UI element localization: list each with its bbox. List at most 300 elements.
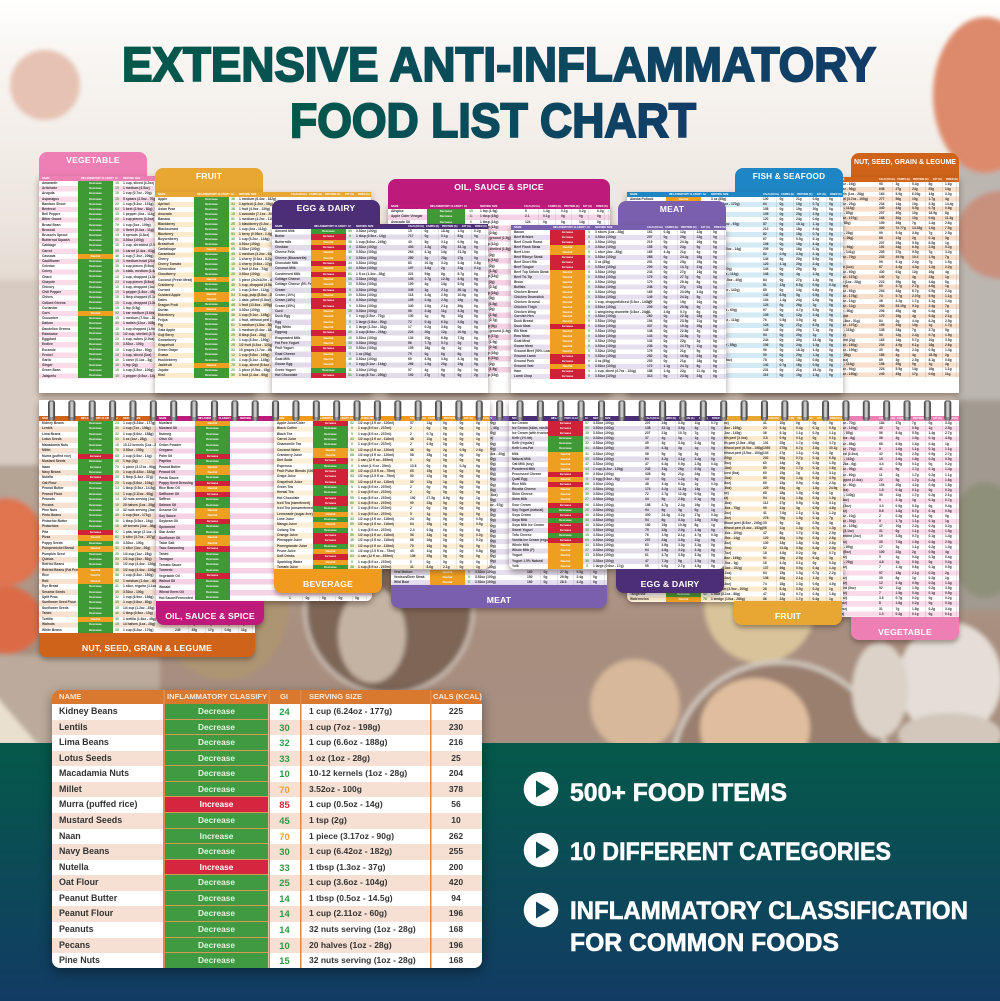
table: egg and dairy rows: Neutral: [561, 492, 570, 496]
table rows: 33: [279, 862, 290, 873]
table: vegetable rows: Decrease: [89, 202, 102, 206]
table: fruit rows: Decrease: [205, 342, 218, 346]
table: beverage rows: Increase: [325, 480, 336, 484]
table: nut rows: CALS (KCAL): [879, 178, 895, 181]
table: vegetable rows: Decrease: [89, 269, 102, 273]
table rows: 45: [279, 815, 290, 826]
table: nut rows: Decrease: [89, 513, 102, 517]
table: egg and dairy rows: NAME: [275, 225, 282, 228]
table: nut rows: Decrease: [89, 426, 102, 430]
table: vegetable rows: Decrease: [89, 337, 102, 341]
table rows: Decrease: [198, 924, 235, 934]
table: vegetable rows: FAT (G): [933, 417, 942, 420]
table: fruit rows: [627, 400, 843, 601]
table: meat rows: 160 0g 27.5g 5.5g 0g 150 0g 29.9g 2.4g 0g 160 0g 28.3 4.2g 0g: [527, 570, 597, 584]
table rows: Decrease: [198, 908, 235, 918]
table: fish rows: GI: [703, 193, 706, 196]
table rows: 1 tsp (2g): [309, 815, 347, 825]
table: vegetable rows: Decrease: [89, 326, 102, 330]
table rows: 85: [279, 799, 290, 810]
tab: vegetable: [851, 617, 959, 640]
table: fruit rows: PROTEIN (G): [325, 193, 340, 196]
table: fruit rows: Decrease: [205, 237, 218, 241]
table: nut rows: Decrease: [89, 622, 102, 626]
table: nut rows: Decrease: [89, 611, 102, 615]
table: beverage rows: Decrease: [324, 432, 337, 436]
table: nut rows: [39, 400, 255, 633]
table: oil rows: INFLAMMATORY CLASSIFY: [198, 417, 231, 420]
table: beverage rows: Decrease: [324, 464, 337, 468]
table rows: 94: [451, 893, 461, 903]
table: beverage rows: Neutral: [326, 549, 335, 553]
table: vegetable rows: 15 15 10 15 20 64 15 20 79 15 15 51 10 39 46 15 35 15 15 23 10 15 10 15 10 52 15 30 15 18 20 15 15 15 30 15 15 15: [115, 181, 119, 378]
table: fruit rows: Decrease: [205, 262, 218, 266]
table: fruit rows: FIBER (G): [830, 417, 842, 420]
table rows: [52, 704, 482, 968]
tab: fruit: [734, 601, 842, 625]
table: nut rows: NAME: [746, 178, 753, 181]
table: vegetable rows: Neutral: [91, 254, 100, 258]
table: fruit rows: CALS (KCAL): [763, 417, 779, 420]
sheet: nut, seed, grain and legume (top row): [740, 153, 962, 400]
table: nut rows: 185 4g 8g 18g 2g 249 45g 17g 0.6g 11g: [175, 622, 246, 632]
table: vegetable rows: Decrease: [89, 243, 102, 247]
table: nut rows: GI: [819, 178, 822, 181]
table rows: 32 nuts serving (1oz - 28g): [309, 955, 416, 965]
table rows: Kidney Beans: [59, 706, 118, 716]
tab: vegetable: [39, 152, 147, 177]
table: meat rows: Increase: [562, 374, 573, 378]
table rows: 1 piece (3.17oz - 90g): [309, 831, 394, 841]
table rows: Decrease: [198, 893, 235, 903]
table: nut rows: Decrease: [89, 497, 102, 501]
table: beverage rows: Neutral: [326, 522, 335, 526]
table: fruit rows: GI: [231, 193, 234, 196]
table: oil rows: INFLAMMATORY CLASSIFY: [430, 205, 463, 208]
table: nut rows: PROTEIN (G): [913, 178, 928, 181]
table: egg and dairy rows: Neutral: [324, 341, 333, 345]
table: meat rows: Neutral: [563, 349, 572, 353]
table: vegetable rows: Decrease: [89, 238, 102, 242]
table: vegetable rows: Decrease: [89, 259, 102, 263]
table: beverage rows: Neutral: [326, 453, 335, 457]
table rows: 25: [279, 877, 290, 888]
table: meat rows: Neutral: [443, 575, 452, 579]
table: egg and dairy rows: Neutral: [561, 467, 570, 471]
table rows: Decrease: [198, 722, 235, 732]
table rows: 216: [449, 737, 463, 747]
table: meat rows: 3 slices (1oz - 28g) 3.52oz (100g) 3.52oz (100g) 3.52oz (100g) 1 slice (3oz - 85g) 3.52oz (100g) 3 oz (85g) 3.52oz (100g) 3.52oz (100g) 3.52oz (100g) 3.52oz (100g) 3.52oz (100g) 3.52oz (100g) 3.52oz (100g) 1 cup, chopped/diced (5.3oz - 140 g) 3.52oz (100g) 1 wing/wing drumette (0.8oz - 24g) 3.52oz (100g) 3.52oz (100g) 3.52oz (100g) 3.52oz (100g) 3.52oz (100g) 3.52oz (100g) 3.52oz (100g) 3.52oz (100g) 3.52oz (100g) 3 oz (85g) 3.52oz (100g) 1 cup, diced (4.7oz - 134g) 3.52oz (100g): [595, 230, 651, 378]
table: egg and dairy rows: Neutral: [561, 543, 570, 547]
table rows: Oat Flour: [59, 877, 98, 887]
table: vegetable rows: Decrease: [89, 290, 102, 294]
table: oil rows: Neutral: [208, 513, 217, 517]
table: beverage rows: Decrease: [324, 426, 337, 430]
table: nut rows: Decrease: [89, 459, 102, 463]
tab: meat: [618, 201, 726, 226]
table rows: 70: [279, 831, 290, 842]
table: egg and dairy rows: Decrease: [559, 446, 572, 450]
table: nut rows: Decrease: [89, 492, 102, 496]
table header: GI: [280, 692, 288, 701]
spiral binding rings: [48, 400, 952, 421]
table: oil rows: 1 tsp (1.9g) 1 tbsp (15g) 1 tbsp (14g) 1 tbsp (13g) 1 tsp (2.6g) 1 tsp, ground (1.9g) 1 tbsp (12g) 1 tsp, shelled (1.8g) 1 tsp (2g) 1 tbsp (14g) 1 tsp (2g) 1 tsp (1.3g) 1 tbsp (14g) 1 tsp (2g) 1 tsp (2.1g) 1 tbsp (16g) 1 tsp (3g) 1 tsp (1.8g) 1 tsp (2g) 1 tsp (1.9g) 1 tsp (2.7g) 1 tbsp (5g) 1 tsp, ground (1.9g) 1 tbsp (17g) 1 tsp (1.9g) 1 tsp (2.1g) 1 tbsp (16g) 1 tbsp (15g) 1 tsp (2g) 1 tsp (1.8g) 1 tbsp (15g): [480, 209, 511, 377]
table: fruit rows: Neutral: [207, 363, 216, 367]
table: oil rows: NAME: [159, 417, 166, 420]
table: vegetable rows: Decrease: [89, 363, 102, 367]
table: fruit rows: Decrease: [205, 217, 218, 221]
tab: beverage: [274, 569, 382, 593]
table: nut rows: Increase: [90, 530, 101, 534]
table rows: Macadamia Nuts: [59, 768, 129, 778]
table: nut rows: Decrease: [89, 606, 102, 610]
table: fruit rows: SERVING SIZE: [239, 193, 256, 196]
table: fish rows: Neutral: [679, 197, 688, 201]
table: vegetable rows: Decrease: [89, 373, 102, 377]
table: meat rows: Increase: [562, 255, 573, 259]
tab: fish and seafood: [735, 168, 843, 193]
table rows: 420: [449, 877, 463, 887]
table: vegetable rows: CARBS (G): [897, 417, 910, 420]
table: oil rows: Decrease: [206, 503, 219, 507]
table: fruit rows: Tangerine Watermelon: [630, 592, 649, 601]
table: egg and dairy rows: Neutral: [561, 487, 570, 491]
table: vegetable rows: Decrease: [89, 212, 102, 216]
table: oil rows: SERVING SIZE: [480, 205, 497, 208]
table: fruit rows: 1 medium (6.4oz - 182g) 1 apricot (1.2oz - 35g) 1 fruit (4.9oz - 139g) 1 avocado (7.1oz - 201g) 1 medium (4.2oz - 118g) 1 blackberry (0.2oz - 5g) 1 cup (4oz - 112g) 1 berry (0.05oz - 1.4g) 1 cup (5.2oz - 144g) 3.52oz (100g) 3.52oz (100g) 1 medium (3.2oz - 91g) 1 cherry (0.3oz - 8.2g) 1 cherry (0.6oz - 17g) 1 fruit (2.6oz - 74g) 3.52oz (100g) 1 piece (2x2x1/2in - 45g) 1 cup, chopped (3.9oz) 1 cup (3.9oz - 112g) 1 cup, pulp (8.8oz - 250g) 1 date, pitted (0.8oz) 1 fruit (13.6oz - 100g) 3.52oz (100g) 1 cup (5.1oz - 145g) 1 fruit, without peel (1.5oz) 1 medium (1.8oz - 50g) 1 medium (6.4oz - 182g) 8 tbsp (1oz - 28g) 1 cup (5.3oz - 150g) 1/2 fruit (4.3oz - 123g) 10 grapes (1.7oz - 49g) 1 cup (5.8oz - 165g) 1 cup (5.1oz - 145g) 1 cup, sliced (5.4oz - 151g) 1 piece (0.5oz - 15g) 1 fruit (2.4oz - 69g): [239, 197, 281, 377]
table: vegetable rows: Decrease: [89, 274, 102, 278]
table: egg and dairy rows: 57 50 35 31 32 31 31 30 47 34 50 0 86 27 30 27 56 20 30 34 36 33 15 60 34 27 33 35 0: [585, 421, 589, 568]
table rows: 1 cup (6.24oz - 177g): [309, 706, 392, 716]
table: vegetable rows: Decrease: [89, 233, 102, 237]
table: fruit rows: Decrease: [205, 322, 218, 326]
table: nut rows: Decrease: [89, 481, 102, 485]
table: egg and dairy rows: Increase: [560, 482, 571, 486]
table: nut rows: Decrease: [89, 584, 102, 588]
table: fruit rows: NAME: [158, 193, 165, 196]
table: egg and dairy rows: PROTEIN (G): [442, 225, 457, 228]
table: egg and dairy rows: Neutral: [561, 548, 570, 552]
table: fruit rows: Decrease: [205, 332, 218, 336]
table: vegetable rows: SERVING SIZE: [123, 177, 140, 180]
table: meat rows: Increase: [562, 235, 573, 239]
sheet: nut, seed, grain and legume (bottom row): [35, 400, 258, 662]
table: egg and dairy rows: FAT (G): [699, 417, 708, 420]
table: fruit rows: Decrease: [205, 197, 218, 201]
table: fruit rows: Decrease: [205, 337, 218, 341]
table: oil rows: Neutral: [208, 464, 217, 468]
table: oil rows: [156, 400, 372, 601]
table rows: 20 halves (1oz - 28g): [309, 940, 392, 950]
table: egg and dairy rows: 3.52oz (100g) 3.52oz (100g) 3.52oz (100g) 3.52oz (100g) 3.52oz (100g) 3.52oz (100g) 3.52oz (100g) 3.52oz (100g) 3.52oz (100g) 1 cup (4.2oz - 119g) 3.52oz (100g) 1 egg (0.3oz - 9g) 3.52oz (100g) 3.52oz (100g) 3.52oz (100g) 3.52oz (100g) 3.52oz (100g) 3.52oz (100g) 3.52oz (100g) 3.52oz (100g) 3.52oz (100g) 3.52oz (100g) 3.52oz (100g) 3.52oz (100g) 3.52oz (100g) 3.52oz (100g) 3.52oz (100g) 3.52oz (100g) 1 large (0.6oz - 17g): [593, 421, 624, 568]
table rows: Pine Nuts: [59, 955, 100, 965]
table: egg and dairy rows: Neutral: [324, 266, 333, 270]
table: vegetable rows: [743, 400, 959, 617]
table: fruit rows: FAT (G): [345, 193, 354, 196]
tab: egg and dairy: [616, 569, 724, 593]
table: meat rows: Neutral: [563, 314, 572, 318]
table: egg and dairy rows: Increase: [323, 298, 334, 302]
table rows: 14: [279, 893, 290, 904]
table: egg and dairy rows: INFLAMMATORY CLASSIFY: [551, 417, 584, 420]
table: meat rows: Neutral: [563, 310, 572, 314]
table rows: 70: [279, 784, 290, 795]
table: meat rows: Neutral: [443, 570, 452, 574]
table: egg and dairy rows: Neutral: [324, 256, 333, 260]
table rows: 1 oz (1oz - 28g): [309, 753, 370, 763]
tab: beverage: BEVERAGE: [303, 579, 353, 589]
table: beverage rows: Increase: [325, 421, 336, 425]
table: beverage rows: Decrease: [324, 565, 337, 569]
table: egg and dairy rows: Decrease: [559, 436, 572, 440]
table: vegetable rows: Decrease: [89, 222, 102, 226]
table rows: 1 cup (0.5oz - 14g): [309, 799, 383, 809]
table: fruit rows: Decrease: [205, 257, 218, 261]
table: oil rows: Increase: [207, 573, 218, 577]
table rows: Peanuts: [59, 924, 94, 934]
table: fruit rows: Neutral: [207, 297, 216, 301]
table: meat rows: INFLAMMATORY CLASSIFY: [433, 417, 466, 420]
table: vegetable rows: Decrease: [89, 181, 102, 185]
table: meat rows: Neutral: [443, 580, 452, 584]
table: fruit rows: Decrease: [205, 282, 218, 286]
table: oil rows: Neutral: [208, 486, 217, 490]
table rows: Increase: [200, 799, 233, 809]
table: nut rows: Neutral: [91, 617, 100, 621]
title: EXTENSIVE ANTI-INFLAMMATORY: [122, 39, 876, 92]
table: fish rows: NAME: [630, 193, 637, 196]
tab: oil, sauce and spice: OIL, SAUCE & SPICE: [165, 611, 255, 621]
table: nut rows: INFLAMMATORY CLASSIFY: [81, 417, 114, 420]
table: oil rows: Decrease: [440, 220, 452, 224]
table: egg and dairy rows: Neutral: [324, 357, 333, 361]
table: fruit rows: Decrease: [205, 232, 218, 236]
table: oil rows: Decrease: [206, 579, 219, 583]
table: oil rows: Increase: [207, 454, 218, 458]
table: fruit rows: PROTEIN (G): [797, 417, 812, 420]
table: fish rows: 3 oz (85g) 1 fillet (6oz - 170g) 1 oz - 28g 3.52oz 3.52oz 1 can (3.7oz - 92g) 3.52oz 3.52oz 3.52oz 1 oz (28g) 1 stick (0.5oz - 14g) 3.52oz 3.52oz 3.52oz 3.52oz (100g) 1 fish (4oz - 113g) 1 piece (1.5oz - 40g) 3.52oz 1 fillet (5oz - 142g) 3.52oz 3.52oz 3.52oz 1 fish (2oz - 60g) 1 oz (28g) 1 fillet (4oz - 113g) 3.52oz 3.52oz 1 oz (28g) 3.52oz 1 can (3oz - 85g) 3.52oz 3.52oz 1 fillet (3.9oz) 3.52oz 3.52oz 3.52oz: [711, 197, 742, 377]
table: egg and dairy rows: Increase: [323, 373, 334, 377]
table: meat rows: Neutral: [563, 290, 572, 294]
table: vegetable rows: GI: [819, 417, 822, 420]
table: vegetable rows: Decrease: [89, 352, 102, 356]
table: fruit rows: Decrease: [205, 272, 218, 276]
table: egg and dairy rows: Increase: [560, 431, 571, 435]
table: vegetable rows: Decrease: [89, 321, 102, 325]
table: egg and dairy rows: FIBER (G): [712, 417, 724, 420]
table: beverage rows: Increase: [325, 501, 336, 505]
table: beverage rows: PROTEIN (G): [444, 417, 459, 420]
table: beverage rows: FAT (G): [464, 417, 473, 420]
table: meat rows: Neutral: [563, 344, 572, 348]
table: beverage rows: Neutral: [326, 512, 335, 516]
tab: meat: [391, 585, 607, 608]
text: 10 different categories: 10 DIFFERENT CATEGORIES: [570, 838, 891, 866]
table: beverage rows: SERVING SIZE: [358, 417, 375, 420]
panel: enlarged table: [52, 690, 482, 968]
sheet: vegetable (bottom row): [746, 400, 962, 646]
table: egg and dairy rows: Increase: [323, 288, 334, 292]
table: meat rows: [511, 225, 726, 393]
table rows: Decrease: [198, 737, 235, 747]
table: nut rows: Neutral: [91, 579, 100, 583]
table rows: 168: [449, 955, 463, 965]
table: meat rows: Veal Mutton Venison/Deer Steak Wild Boar: [394, 570, 425, 584]
table: meat rows: Increase: [562, 359, 573, 363]
tab: oil, sauce and spice: [156, 601, 264, 625]
table: beverage rows: Neutral: [326, 448, 335, 452]
bottom band: green to navy gradient: [0, 743, 1000, 1001]
table: vegetable rows: Decrease: [89, 368, 102, 372]
table: oil rows: Neutral: [208, 470, 217, 474]
table: egg and dairy rows: CARBS (G): [426, 225, 439, 228]
table: vegetable rows: PROTEIN (G): [913, 417, 928, 420]
table: egg and dairy rows: Decrease: [559, 441, 572, 445]
sheet: egg and dairy (top row): [268, 200, 492, 400]
tab: meat: MEAT: [660, 204, 684, 214]
table rows: 56: [451, 799, 461, 809]
table: egg and dairy rows: CALS (KCAL): [408, 225, 424, 228]
table: beverage rows: Neutral: [326, 560, 335, 564]
tab: vegetable: VEGETABLE: [878, 627, 932, 637]
table: beverage rows: INFLAMMATORY CLASSIFY: [316, 417, 349, 420]
table: egg and dairy rows: Increase: [323, 304, 334, 308]
table: fruit rows: Decrease: [205, 207, 218, 211]
table rows: Lima Beans: [59, 737, 109, 747]
table header: INFLAMMATORY CLASSIFY: [167, 692, 267, 701]
table: meat rows: Neutral: [563, 270, 572, 274]
table rows: Decrease: [198, 753, 235, 763]
table: beverage rows: Increase: [325, 474, 336, 478]
table: meat rows: Increase: [562, 354, 573, 358]
table: vegetable rows: NAME: [42, 177, 49, 180]
table: meat rows: 0 0 0: [468, 570, 470, 584]
tab: meat: MEAT: [487, 595, 511, 605]
table: oil rows: Decrease: [206, 524, 219, 528]
table: nut rows: 1 cup (6.24oz - 177g) 1 cup (7oz - 198g) 1 cup (6.6oz - 188g) 1 oz (1oz - 28g) 10-12 kernels (1oz - 28g) 3.52oz - 100g 1 cup (0.5oz - 14g) 1 tsp (2g) 1 piece (3.17oz - 90g) 1 cup (6.42oz - 182g) 1 tbsp (1.3oz - 37g) 1 cup (3.6oz - 104g) 1 tbsp (0.5oz - 14.5g) 1 cup (2.11oz - 60g) 32 nuts serving (1oz - 28g) 20 halves (1oz - 28g) 32 nuts serving (1oz - 28g) 1 cup (6oz - 171g) 1 tbsp (0.5oz - 16g) 49 kernels (1oz - 28g) 1 pita, large (2.1oz - 60g) 1 slice (3.7oz - 107g) 3.52oz - 100g 1 slice (1oz - 26g) 1/4 cup (1oz - 28g) 1/2 cup (3oz - 85g) 1/2 cup (4.4oz - 126g) 1/2 cup (4.4oz - 126g) 1 cup (6.3oz - 180g) 1 medium (1.4oz - 40g) 1 slice, regular (1.1oz) 3.52oz - 100g 1 cup (6.9oz - 196g) 1 cup (2.8oz - 80g) 1/4 cup (1.2oz - 35g) 1 tbsp (0.5oz - 15g) 1 tortilla (1.6oz - 45g) 14 halves (1oz - 28g) 1 cup (6.3oz - 179g): [123, 421, 164, 632]
table: vegetable rows: Decrease: [89, 248, 102, 252]
table: vegetable rows: Decrease: [89, 217, 102, 221]
table: meat rows: INFLAMMATORY CLASSIFY: [553, 226, 586, 229]
table: nut rows: Neutral: [91, 535, 100, 539]
table: oil rows: GI: [464, 205, 467, 208]
table: vegetable rows: Decrease: [89, 316, 102, 320]
table: nut rows: Increase: [90, 454, 101, 458]
table: fruit rows: FAT (G): [817, 417, 826, 420]
table: oil rows: Neutral: [208, 541, 217, 545]
table: beverage rows: Decrease: [324, 442, 337, 446]
table: fruit rows: Decrease: [205, 202, 218, 206]
table: meat rows: FAT (G): [701, 226, 710, 229]
table: egg and dairy rows: Decrease: [559, 508, 572, 512]
table rows: Decrease: [198, 940, 235, 950]
table: meat rows: FIBER (G): [714, 226, 726, 229]
table: vegetable rows: Decrease: [89, 342, 102, 346]
table rows: 168: [449, 924, 463, 934]
icon: play bullet 2: [524, 833, 558, 867]
table: meat rows: Neutral: [563, 285, 572, 289]
sheet: fish and seafood (top row): [622, 168, 848, 400]
tab: nut, seed, grain and legume: [39, 633, 255, 657]
table: vegetable rows: Decrease: [89, 280, 102, 284]
tab: nut, seed, grain and legume: NUT, SEED, GRAIN & LEGUME: [82, 643, 212, 653]
table: oil rows: SERVING SIZE: [240, 417, 257, 420]
table: oil rows: 5 1.4g 0.1g 0.2g 0.4g 2.1 0.1g 0g 0g 0g 124 0g 0g 14g 0g: [525, 209, 604, 224]
table: nut rows: Decrease: [89, 562, 102, 566]
table: egg and dairy rows: Neutral: [324, 362, 333, 366]
table: oil rows: Decrease: [206, 448, 219, 452]
table: meat rows: Neutral: [563, 364, 572, 368]
table: beverage rows: Decrease: [324, 490, 337, 494]
table: fruit rows: NAME: [630, 417, 637, 420]
table: fruit rows: Decrease: [205, 212, 218, 216]
table: fruit rows: INFLAMMATORY CLASSIFY: [197, 193, 230, 196]
table: vegetable rows: Decrease: [89, 228, 102, 232]
table: nut rows: INFLAMMATORY CLASSIFY: [785, 178, 818, 181]
table rows: 32: [279, 737, 290, 748]
table rows: Pecans: [59, 940, 90, 950]
table rows: 1 cup (7oz - 198g): [309, 722, 380, 732]
table: fish rows: Alaska Pollock: [630, 197, 653, 201]
table rows: Decrease: [198, 784, 235, 794]
text: 500+ food items: 500+ FOOD ITEMS: [570, 779, 787, 807]
table: vegetable rows: Decrease: [89, 207, 102, 211]
table: nut rows: Decrease: [89, 443, 102, 447]
table rows: 33: [279, 753, 290, 764]
table: meat rows: Neutral: [563, 305, 572, 309]
table rows: Decrease: [198, 815, 235, 825]
table rows: 204: [449, 768, 463, 778]
table: beverage rows: GI: [350, 417, 353, 420]
table: oil rows: Decrease: [206, 432, 219, 436]
column dividers: [163, 690, 432, 968]
table: nut rows: SERVING SIZE: [827, 178, 844, 181]
table: nut rows: Decrease: [89, 628, 102, 632]
table: egg and dairy rows: FIBER (G): [475, 225, 487, 228]
table: nut rows: Decrease: [89, 557, 102, 561]
table: egg and dairy rows: Increase: [323, 330, 334, 334]
table: oil rows: CALS (KCAL): [524, 205, 540, 208]
table: meat rows: NAME: [394, 417, 401, 420]
table: vegetable rows: Decrease: [89, 357, 102, 361]
table: vegetable rows: Decrease: [89, 191, 102, 195]
table: fruit rows: Decrease: [205, 352, 218, 356]
table: meat rows: GI: [467, 417, 470, 420]
table: egg and dairy rows: [509, 400, 724, 569]
table: egg and dairy rows: Increase: [323, 261, 334, 265]
table: meat rows: CARBS (G): [665, 226, 678, 229]
table: nut rows: Decrease: [89, 421, 102, 425]
tab: oil, sauce and spice: [388, 179, 610, 204]
table: nut rows: Decrease: [89, 470, 102, 474]
table: beverage rows: 57 14g 0g 0g 0g 2 0g 0g 0g 0g 2 0.7g 0g 0g 0g 48 11g 1g 0g 1g 2 0.5g 0g 0g 0g 46 9g 2g 0.5g 2.6g 58 15g 1g 0g 0g 0 0g 0g 0g 0g 10.8 0g 0g 0.2g 0g 65 15g 1g 0g 0g 50 12g 0g 0g 0g 50 12g 1g 0g 0g 2 0g 0g 0g 0g 2 0g 0g 0g 0g 192 27.3g 8.9g 6g 1g 90 23g 0g 0g 0g 2 0g 0g 0g 0g 5 1g 0g 0g 0g 24 8g 0g 0g 0.5g 64 15g 1g 0g 0.5g 2.4 0.5g 0g 0g 0g 56 13g 1g 0g 0.2g 66 16g 0g 0g 0.2g 70 16g 0g 0g 0g 45 11g 0g 0g 0.8g 136 35g 0g 0g 0g 0 0g 0g 0g 0g 41 8.6g 2.1g 0g 1g: [410, 421, 483, 569]
table rows: 10: [279, 940, 290, 951]
table: oil rows: Decrease: [206, 584, 219, 588]
table: vegetable rows: NAME: [746, 417, 753, 420]
table: fruit rows: Neutral: [207, 307, 216, 311]
table rows: 200: [449, 862, 463, 872]
table: egg and dairy rows: [272, 224, 488, 393]
table: fish rows: 100 0g 21g 0.6g 0g 64 0g 13g 0.7g 0g 158 0g 19g 20g 0g 105 0g 23g 2.9g 0g 120 0g 24g 0.6g 0g 87 0g 18.1g 1.1g 0g 213 0g 18g 9.4g 0g 82 0g 18g 0.7g 0g 67 0g 5.5g 5.1g 0g 106 0g 18g 4.4g 0g 209 0g 16g 0.1g 0g 82 0.9g 3.5g 2.1g 0g 144 0g 20g 6.9g 0g 120 4.1g 20g 2.4g 0g 144 0g 20g 5g 0g 146 0g 4g 1.3g 0g 84 0g 27g 1.3g 0g 81 12g 6.5g 0.9g 0.4g 85 0g 14g 0.8g 0g 142 8.5g 5g 0.5g 0g 104 1.4g 24g 0.6g 0g 124 0g 26g 1g 0g 97 0g 4.7g 5.5g 0g 109 0g 12g 1.4g 0g 76 0.5g 3.5g 1g 0g 124 0g 21g 6.2g 0g 145 0g 20g 7.1g 0g 94 0g 20g 1g 0g 244 0g 30g 13.4g 0g 106 0g 24g 1.3g 0g 96 0g 18.2g 1.3g 0g 90 0g 20g 1.3g 0g 78 0g 18g 0.8g 0g 142 0.7g 16g 0.5g 0g 231 0g 21g 15.2g 0g 119 0g 19g 1.3g 0g: [763, 197, 836, 377]
table: oil rows: GI: [232, 417, 235, 420]
table: beverage rows: NAME: [277, 417, 284, 420]
table: meat rows: Increase: [562, 265, 573, 269]
tab: fish and seafood: FISH & SEAFOOD: [753, 172, 825, 181]
table: fruit rows: Decrease: [205, 312, 218, 316]
table: oil rows: NAME: [391, 205, 398, 208]
table: egg and dairy rows: 15 0g 18.4g 1.0g 0.2g 717 0g 0.1g 81g 0g 40 5g 3.1g 0.9g 0g 403 1.3g 25g 33.1g 0g 264 4.1g 14g 21.3g 0g 280 2g 28g 17g 0g 83 10.3g 3.2g 3.4g 0.8g 197 2.8g 2g 21g 0.1g 321 54g 8g 8.7g 0g 103 2.7g 12.5g 4.5g 0g 100 4g 14g 5.0g 0g 345 3g 2.1g 36.1g 0g 118 3.4g 2.9g 10.6g 0g 195 3.4g 2.5g 19g 0g 340 2.8g 2.1g 36g 0g 98 3.4g 11g 4.3g 0g 130 1g 9g 10g 0g 72 0.4g 6.3g 4.8g 0g 17 0.2g 3.6g 0g 0g 224 20g 12g 10.6g 0g 134 10g 6.8g 7.5g 0g 56 7.7g 5.7g 0g 0g 105 18g 4g 1g 0g 75 0g 6g 6g 0g 69 4.5g 3.6g 4.1g 0g 266 1.9g 20g 19g 0g 97 4g 9g 5g 0g 192 27g 9g 6g 2g: [408, 229, 481, 377]
table: meat rows: Increase: [562, 324, 573, 328]
